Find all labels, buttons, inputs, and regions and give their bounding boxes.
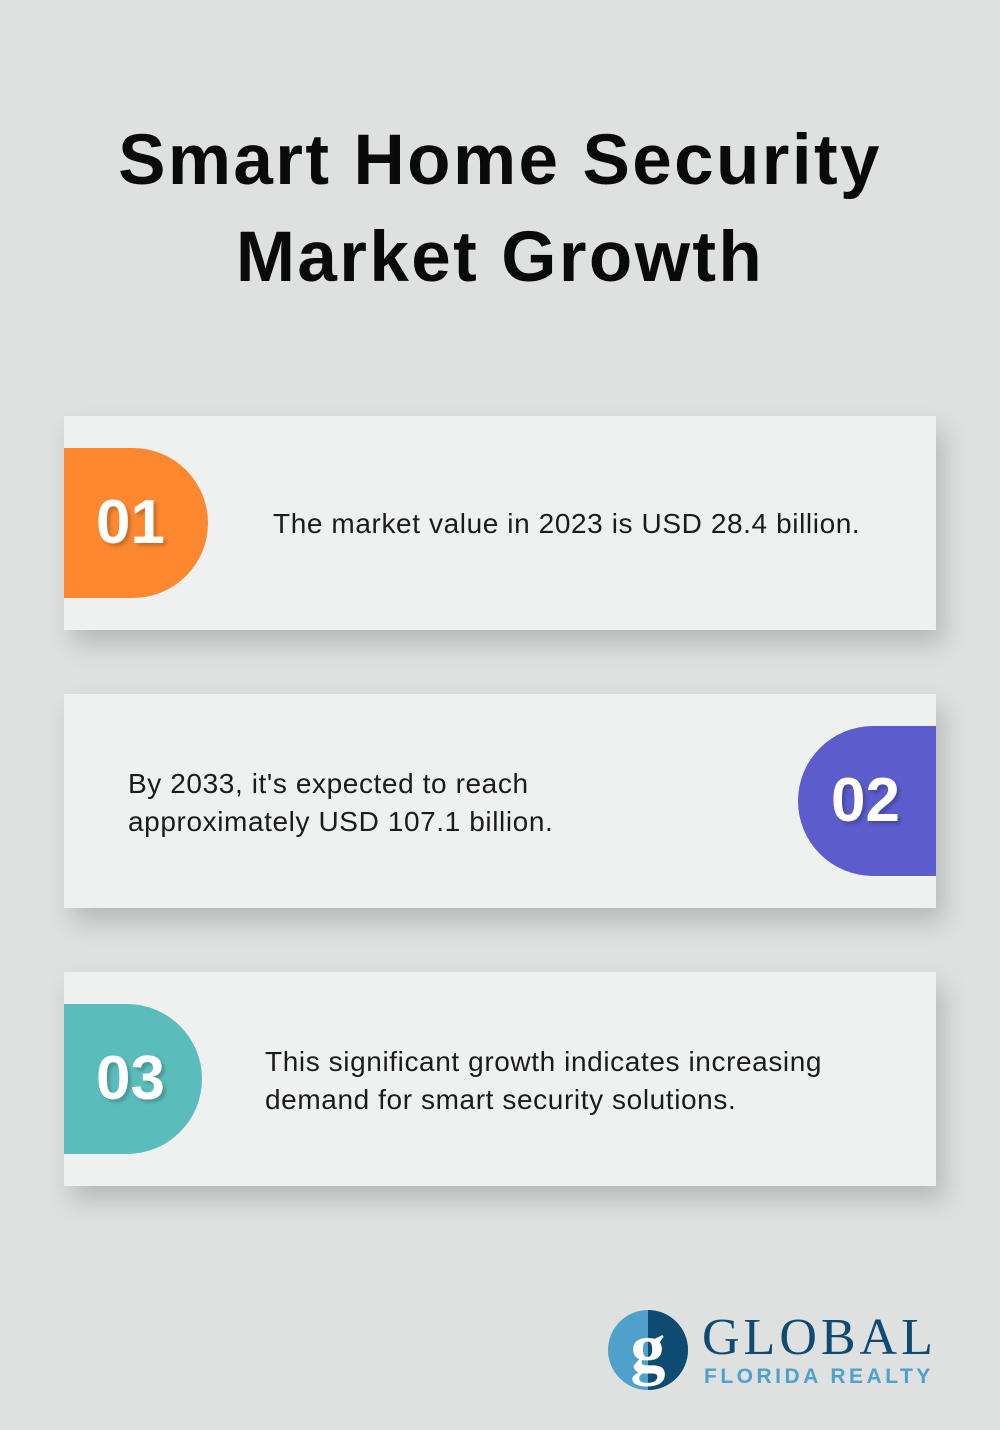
text 3: This significant growth indicates increasing bbox=[265, 1046, 822, 1077]
logo text: GLOBAL bbox=[702, 1309, 937, 1366]
logo: FLORIDA REALTY bbox=[704, 1365, 934, 1388]
title: Market Growth bbox=[236, 218, 764, 297]
logo bbox=[608, 1309, 937, 1390]
icon: g circle bbox=[608, 1310, 688, 1390]
badge 03 bbox=[64, 1004, 202, 1154]
badge 01: 01 bbox=[96, 488, 165, 557]
badge 01 bbox=[64, 448, 208, 598]
text 3 bbox=[265, 1046, 822, 1115]
text 2: By 2033, it's expected to reach bbox=[128, 768, 529, 799]
text 1: The market value in 2023 is USD 28.4 billion. bbox=[273, 508, 860, 539]
icon: g circle: g bbox=[630, 1310, 666, 1387]
badge 03: 03 bbox=[96, 1044, 165, 1113]
card 1 bbox=[64, 416, 936, 630]
badge 02 bbox=[798, 726, 936, 876]
text 2 bbox=[128, 768, 553, 837]
text 2: approximately USD 107.1 billion. bbox=[128, 806, 553, 837]
text 3: demand for smart security solutions. bbox=[265, 1084, 736, 1115]
card 3 bbox=[64, 972, 936, 1186]
title: Smart Home Security bbox=[118, 121, 882, 200]
card 2 bbox=[64, 694, 936, 908]
badge 02: 02 bbox=[831, 766, 900, 835]
title bbox=[118, 121, 882, 297]
